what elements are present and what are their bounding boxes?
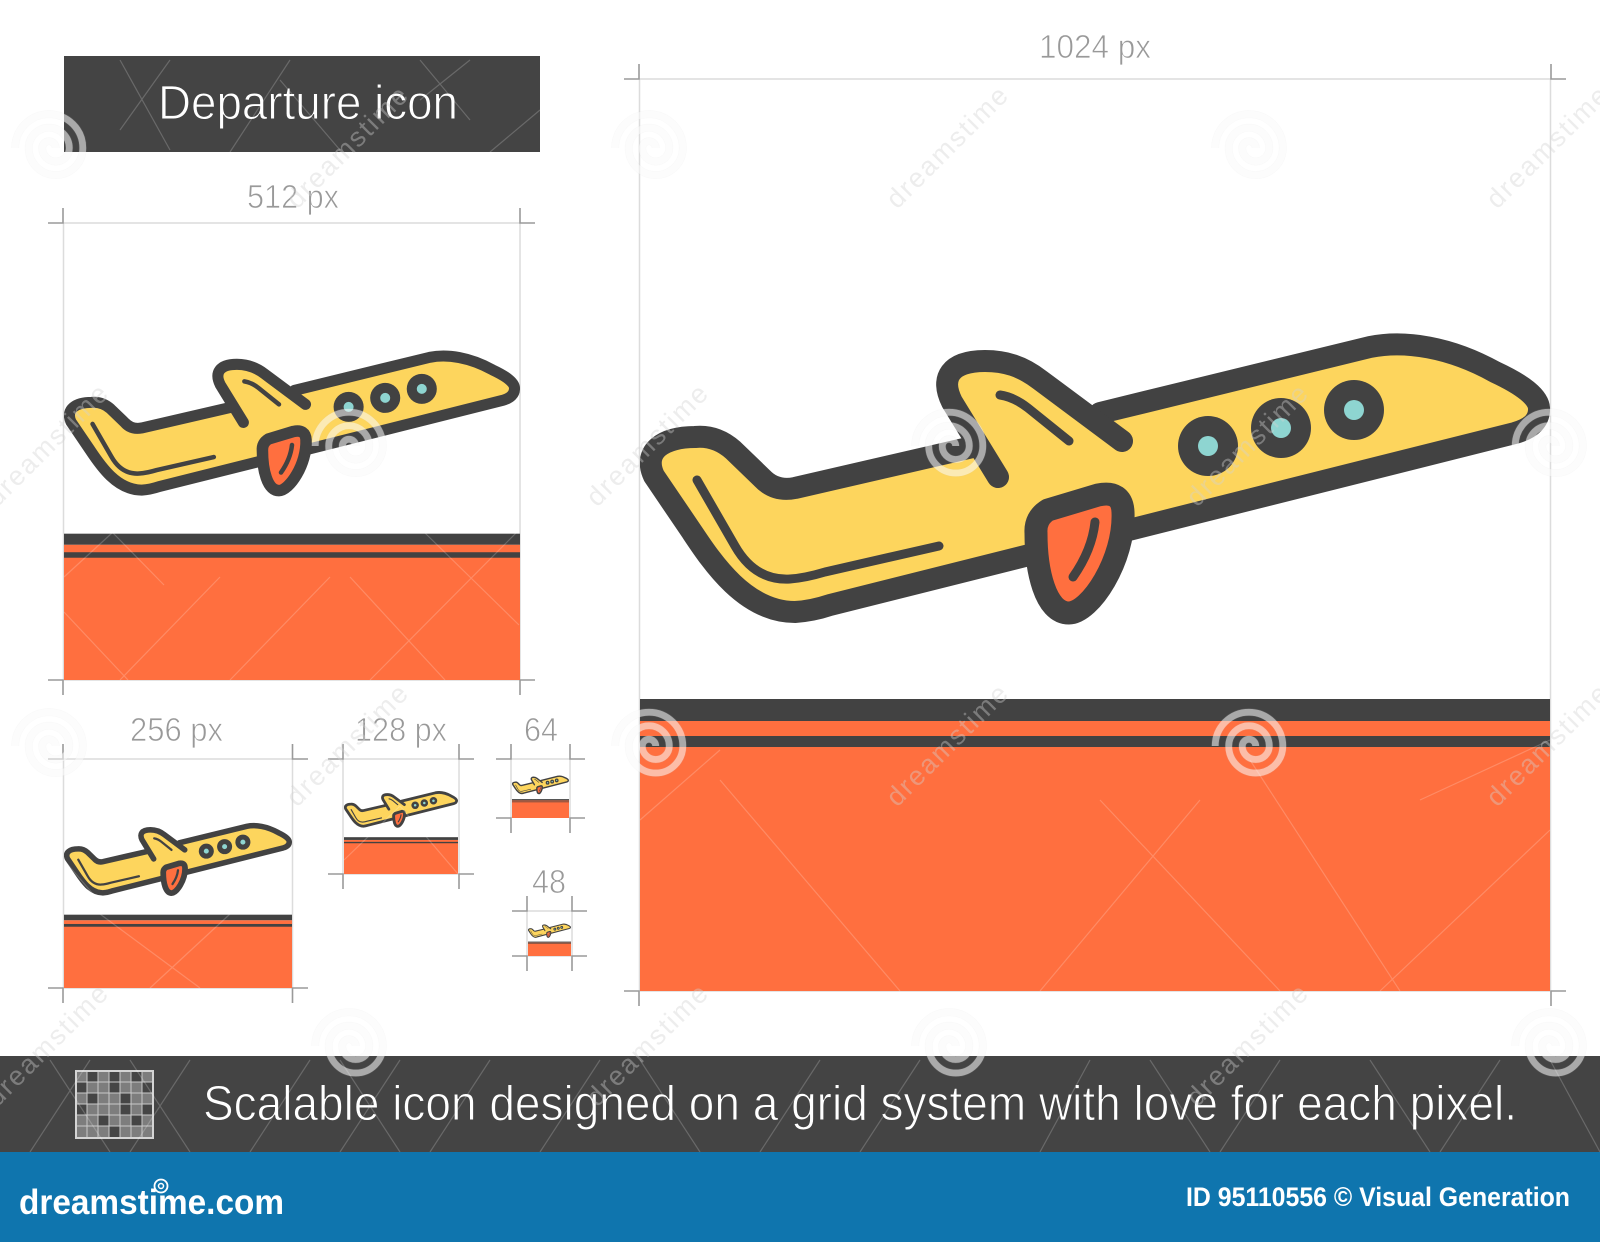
caption bar — [0, 1056, 1600, 1152]
image credit: ID 95110556 © Visual Generation — [1186, 1182, 1570, 1212]
watermark overlay: dreamstime — [280, 677, 415, 812]
watermark overlay: dreamstime — [880, 677, 1015, 812]
label: 48: 48 — [532, 863, 566, 900]
watermark overlay: dreamstime — [1180, 377, 1315, 512]
label: 1024 px: 1024 px — [1039, 28, 1151, 65]
watermark overlay: dreamstime — [1180, 977, 1315, 1112]
panel: 64 px icon — [496, 711, 585, 833]
panel: 48 px icon — [512, 863, 587, 971]
footer logo: dreamstime.com — [19, 1183, 284, 1222]
watermark overlay: dreamstime — [280, 79, 415, 214]
label: 256 px: 256 px — [130, 711, 223, 748]
footer bar — [0, 1152, 1600, 1242]
title bar: Departure icon — [158, 77, 458, 130]
panel: 256 px icon — [48, 711, 308, 1003]
panel: 1024 px icon — [624, 28, 1566, 1006]
panel: 128 px icon — [328, 711, 474, 889]
title bar — [64, 56, 540, 152]
watermark overlay: dreamstime — [880, 79, 1015, 214]
panel: 512 px icon — [48, 178, 535, 695]
label: 128 px: 128 px — [355, 711, 447, 748]
label: 64: 64 — [524, 711, 558, 748]
caption text: Scalable icon designed on a grid system with love for each pixel. — [203, 1077, 1517, 1131]
watermark overlay: dreamstime — [580, 377, 715, 512]
icon: pixel grid — [76, 1071, 153, 1138]
watermark overlay: dreamstime — [580, 977, 715, 1112]
label: 512 px: 512 px — [247, 178, 339, 215]
